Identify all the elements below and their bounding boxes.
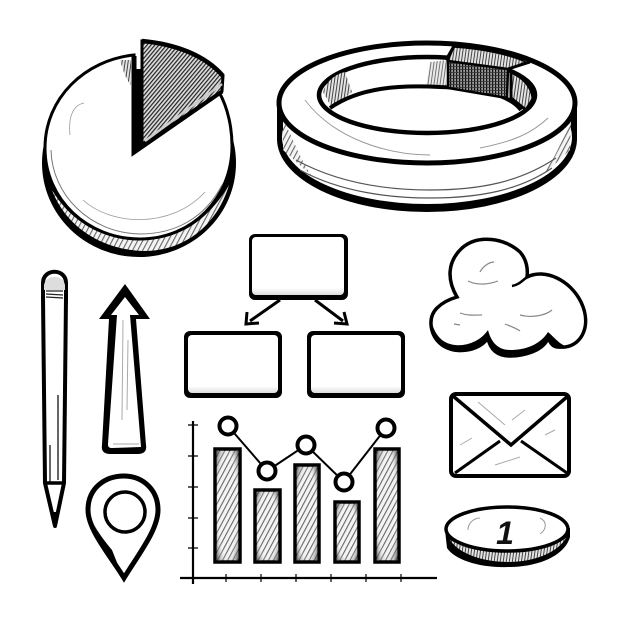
chart axes — [180, 421, 437, 584]
ring top face — [279, 43, 575, 163]
flowchart right box — [307, 331, 405, 398]
cloud — [431, 239, 586, 357]
pie chart — [42, 41, 236, 257]
coin — [445, 507, 570, 567]
pin hole — [105, 492, 145, 532]
ring hole — [319, 57, 535, 133]
coin number: 1 — [496, 515, 514, 551]
flowchart top box — [249, 234, 348, 300]
flowchart left box — [184, 331, 282, 398]
pie base — [42, 69, 236, 257]
pencil — [43, 272, 66, 527]
coin face — [446, 507, 568, 551]
arrow to right box — [315, 300, 347, 324]
envelope flap — [453, 396, 568, 445]
ring shaded segment — [448, 47, 526, 69]
pie lifted slice — [142, 41, 223, 145]
bar and line chart — [180, 418, 437, 584]
envelope lower folds — [455, 441, 567, 473]
donut ring chart — [277, 43, 577, 212]
bars — [215, 449, 399, 562]
pencil lead lines — [44, 481, 65, 485]
pie top face — [45, 55, 232, 239]
up arrow — [99, 284, 150, 454]
flowchart — [184, 234, 405, 398]
bar edge shading — [217, 451, 397, 560]
trend line — [228, 426, 386, 482]
location pin — [88, 476, 158, 578]
arrow to left box — [246, 300, 280, 324]
ring outer body — [277, 66, 577, 212]
envelope — [451, 394, 569, 476]
trend markers — [220, 418, 394, 490]
